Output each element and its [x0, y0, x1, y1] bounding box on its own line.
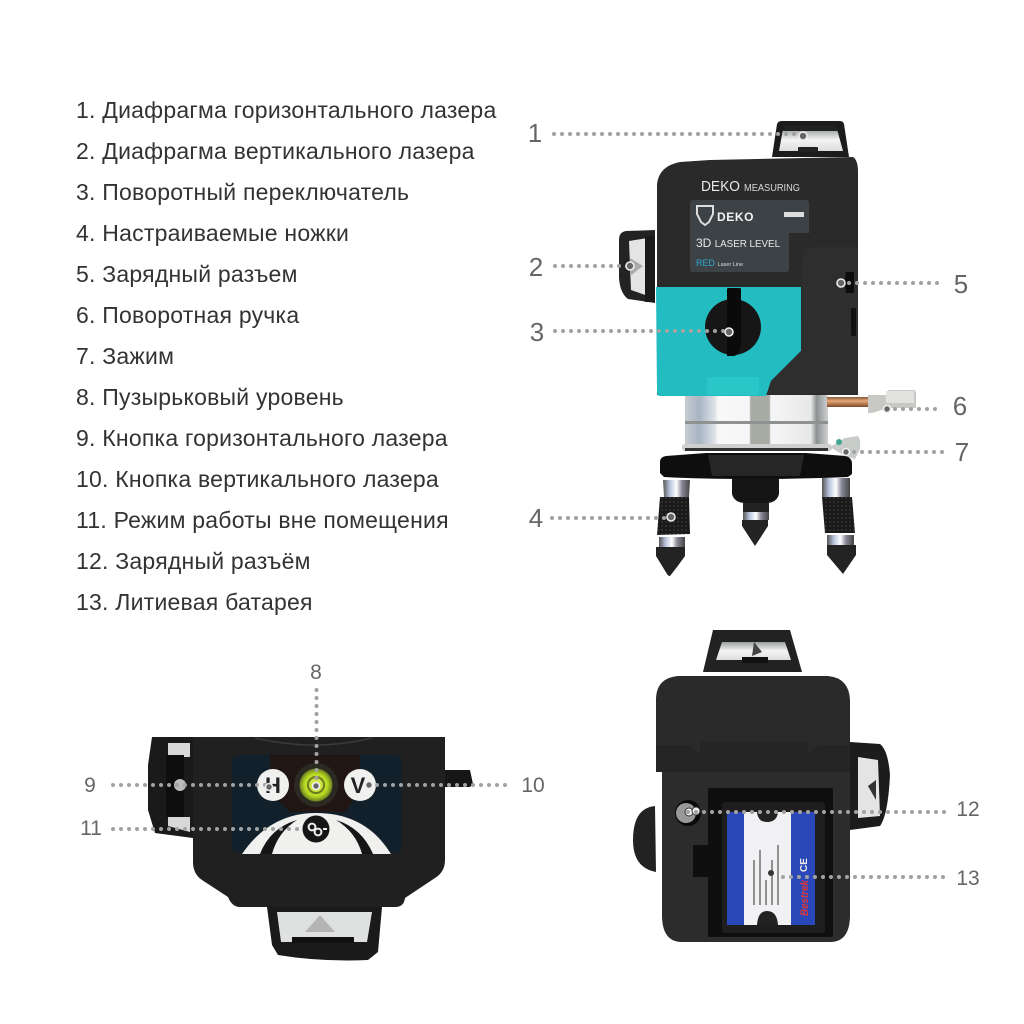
base highlight	[708, 455, 804, 476]
label plate	[690, 200, 809, 272]
center leg	[732, 478, 779, 546]
battery notch top	[757, 812, 778, 822]
callout numbers: 8	[310, 661, 322, 684]
parts list: 7. Зажим	[76, 343, 174, 369]
CE mark: CE	[799, 858, 810, 872]
body	[657, 157, 858, 395]
top prism rear	[703, 630, 802, 672]
left leg	[656, 480, 690, 576]
right prism rear	[850, 742, 890, 830]
callout markers	[266, 132, 890, 790]
side panel	[767, 247, 858, 394]
callout numbers: 7	[955, 437, 969, 467]
rear body upper	[656, 676, 850, 772]
callout numbers: 13	[956, 867, 980, 890]
bubble level	[294, 763, 338, 807]
parts list	[76, 97, 496, 615]
callout numbers: 5	[954, 269, 968, 299]
rear view of laser level	[633, 630, 890, 942]
parts list: 1. Диафрагма горизонтального лазера	[76, 97, 496, 123]
top view of laser level	[148, 737, 473, 960]
parts list: 5. Зарядный разъем	[76, 261, 298, 287]
bottom prism	[267, 907, 382, 960]
horizontal button	[257, 769, 289, 801]
reddish glow	[270, 755, 360, 812]
callout numbers: 9	[84, 774, 96, 797]
front view of laser level	[619, 121, 916, 576]
red laser line label: RED Laser Line	[696, 258, 743, 268]
left prism side	[148, 737, 193, 838]
horizontal button: H	[265, 773, 281, 798]
level clamp	[830, 436, 860, 459]
parts list: 6. Поворотная ручка	[76, 302, 299, 328]
logo shield	[697, 206, 713, 225]
clamp and base cylinder	[682, 395, 832, 451]
tripod base	[660, 453, 852, 479]
parts list: 4. Настраиваемые ножки	[76, 220, 349, 246]
callout numbers: 4	[529, 503, 543, 533]
rotary switch	[705, 288, 761, 356]
callout numbers: 2	[529, 252, 543, 282]
parts list: 12. Зарядный разъём	[76, 548, 311, 574]
teal panel	[656, 287, 801, 396]
parts list: 3. Поворотный переключатель	[76, 179, 409, 205]
outdoor mode button	[302, 816, 330, 842]
control panel	[232, 755, 402, 854]
parts list: 2. Диафрагма вертикального лазера	[76, 138, 475, 164]
device body	[193, 737, 445, 907]
logo wordmark: DEKO	[717, 210, 754, 224]
parts list: 8. Пузырьковый уровень	[76, 384, 344, 410]
charging port slot	[845, 272, 854, 293]
callout numbers: 3	[530, 317, 544, 347]
battery brand: Bestrek	[799, 879, 811, 916]
latch recess	[693, 845, 708, 877]
outdoor mode arcs	[242, 813, 391, 854]
brand suffix: MEASURING	[744, 183, 800, 194]
battery fine print	[754, 845, 778, 905]
top prism window	[772, 121, 849, 157]
outdoor mode symbol	[309, 824, 327, 835]
battery notch bottom	[757, 911, 778, 925]
upper body step	[656, 742, 850, 772]
callout numbers: 1	[528, 118, 542, 148]
thumb screw	[827, 390, 916, 413]
dial side	[633, 806, 656, 872]
callout leader lines	[113, 134, 948, 877]
model tag	[784, 212, 804, 217]
product name: 3D LASER LEVEL	[696, 236, 781, 250]
left prism window	[619, 230, 655, 303]
callout numbers: 6	[953, 391, 967, 421]
battery bay	[708, 788, 833, 937]
right leg	[822, 478, 856, 574]
vertical button: V	[351, 773, 366, 798]
teal notch	[707, 377, 759, 395]
callout numbers: 11	[80, 817, 102, 840]
usb slot	[851, 308, 856, 336]
battery	[722, 802, 825, 933]
callout numbers: 12	[956, 798, 980, 821]
parts list: 9. Кнопка горизонтального лазера	[76, 425, 448, 451]
vertical button	[344, 769, 376, 801]
rear body lower	[662, 772, 850, 942]
parts list: 11. Режим работы вне помещения	[76, 507, 449, 533]
battery mark	[768, 870, 774, 876]
right tab	[445, 770, 473, 787]
parts list: 10. Кнопка вертикального лазера	[76, 466, 439, 492]
charging socket	[675, 800, 701, 826]
callout numbers: 10	[521, 774, 545, 797]
top arc	[255, 738, 372, 745]
brand text: DEKO	[701, 178, 740, 195]
callout numbers	[80, 118, 980, 890]
parts list: 13. Литиевая батарея	[76, 589, 313, 615]
